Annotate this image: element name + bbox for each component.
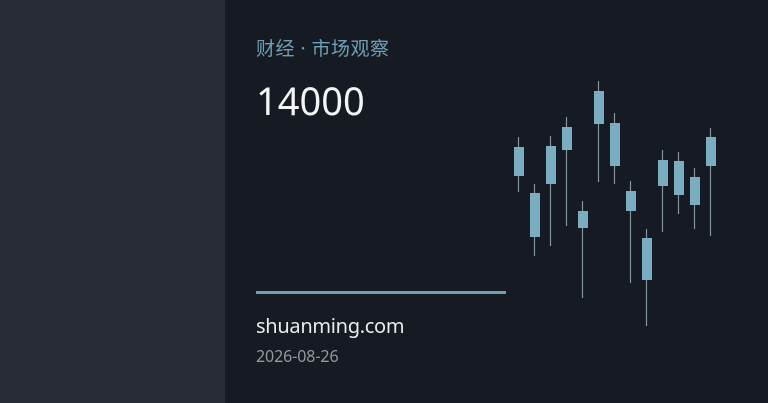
divider line bbox=[256, 291, 506, 294]
title: number: 14000 bbox=[256, 75, 365, 127]
panel: left sidebar bbox=[0, 0, 225, 403]
heading: category label: 财经 · 市场观察 bbox=[256, 35, 389, 61]
text: date: 2026-08-26 bbox=[256, 345, 339, 367]
text: website: shuanming.com bbox=[256, 312, 404, 339]
